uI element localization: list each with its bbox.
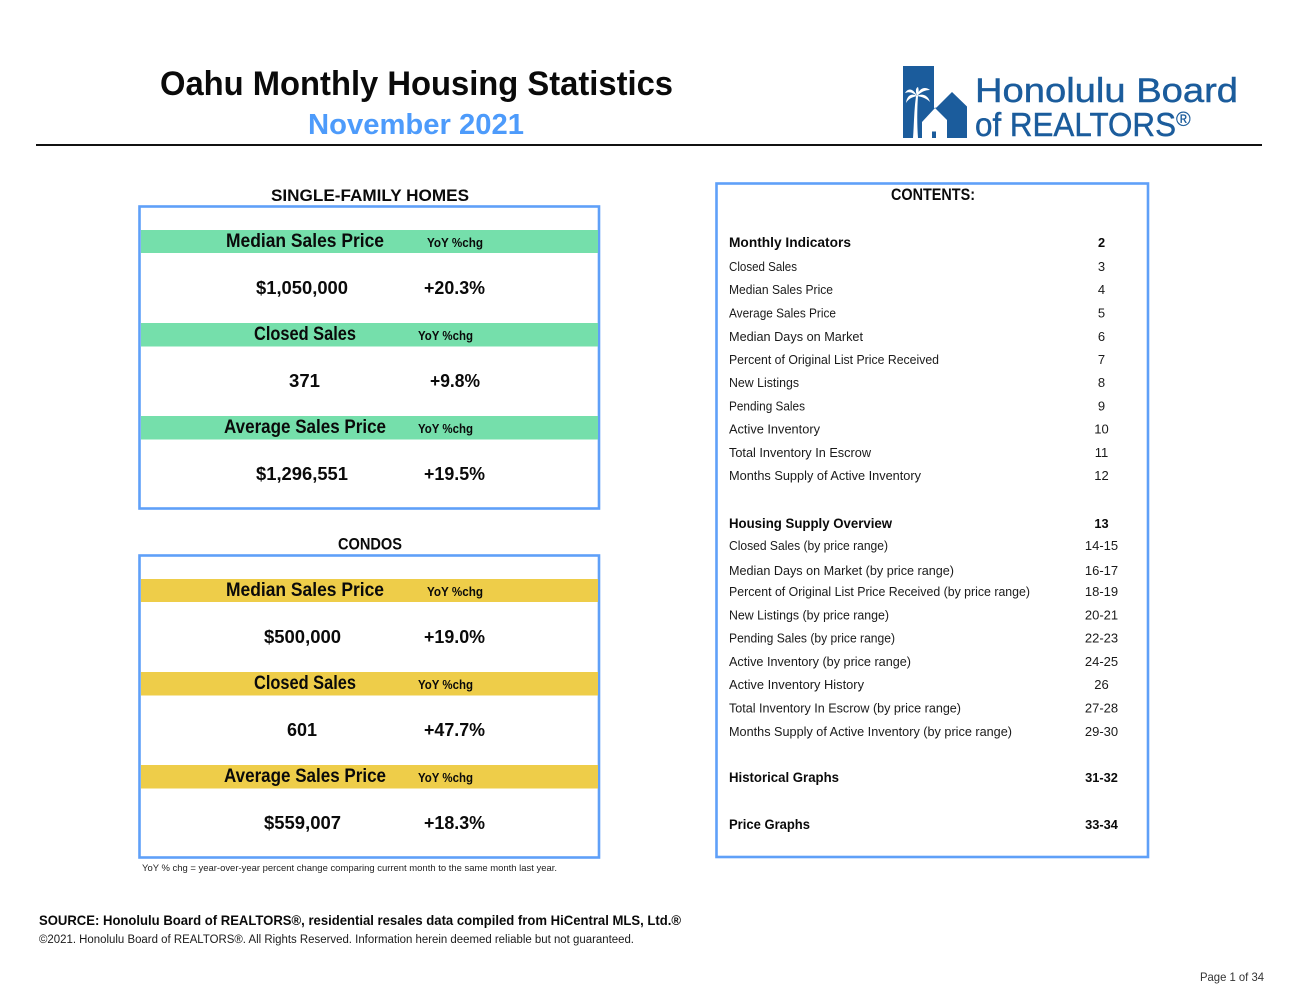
section: price graphs: Price Graphs bbox=[729, 817, 810, 832]
section: housing supply overview: 27-28 bbox=[1085, 700, 1118, 716]
band: closed sales: Closed Sales bbox=[254, 324, 356, 345]
section: housing supply overview: 29-30 bbox=[1085, 724, 1118, 739]
section: historical graphs: Historical Graphs bbox=[729, 770, 839, 785]
heading: single-family homes: SINGLE-FAMILY HOMES bbox=[271, 187, 469, 205]
band: condo average sales price: YoY %chg bbox=[418, 771, 473, 785]
section: monthly indicators: Average Sales Price bbox=[729, 306, 836, 320]
section: housing supply overview: Pending Sales (by price range) bbox=[729, 630, 895, 646]
section: monthly indicators: 3 bbox=[1098, 259, 1105, 274]
logo: Honolulu Board of REALTORS bbox=[903, 66, 1238, 143]
band: condo closed sales: Closed Sales bbox=[254, 673, 356, 694]
section: monthly indicators: 2 bbox=[1098, 235, 1105, 250]
logo text line 1: Honolulu Board bbox=[975, 72, 1238, 110]
section: monthly indicators: 8 bbox=[1098, 375, 1105, 390]
change: closed sales: +9.8% bbox=[430, 370, 480, 391]
section: housing supply overview: Total Inventory In Escrow (by price range) bbox=[729, 700, 961, 716]
band: average sales price: Average Sales Price bbox=[224, 417, 386, 438]
source line: SOURCE: Honolulu Board of REALTORS®, residential resales data compiled from HiCentral MLS, Ltd.® bbox=[39, 912, 682, 928]
section: housing supply overview: 18-19 bbox=[1085, 584, 1118, 599]
value: condo average sales price: $559,007 bbox=[264, 812, 341, 833]
band: condo median sales price: YoY %chg bbox=[427, 585, 483, 599]
section: monthly indicators: 10 bbox=[1094, 422, 1109, 436]
section: housing supply overview: 24-25 bbox=[1085, 654, 1118, 669]
band: closed sales: YoY %chg bbox=[418, 329, 473, 343]
section: monthly indicators: 4 bbox=[1098, 282, 1105, 297]
section: housing supply overview: 22-23 bbox=[1085, 630, 1118, 646]
title: Oahu Monthly Housing Statistics bbox=[160, 65, 673, 103]
section: housing supply overview bbox=[729, 516, 1118, 739]
section: housing supply overview: 26 bbox=[1094, 677, 1109, 692]
band: average sales price bbox=[141, 416, 598, 440]
change: condo average sales price: +18.3% bbox=[424, 812, 485, 833]
section: monthly indicators: Percent of Original List Price Received bbox=[729, 352, 939, 367]
value: condo closed sales: 601 bbox=[287, 719, 317, 740]
section: price graphs: 33-34 bbox=[1085, 817, 1119, 832]
section: historical graphs: 31-32 bbox=[1085, 770, 1118, 785]
band: average sales price: YoY %chg bbox=[418, 422, 473, 436]
band: closed sales bbox=[141, 323, 598, 346]
page number: Page 1 of 34 bbox=[1200, 970, 1264, 984]
section: housing supply overview: 16-17 bbox=[1085, 563, 1118, 578]
section: monthly indicators: Closed Sales bbox=[729, 259, 797, 274]
section: monthly indicators: 7 bbox=[1098, 352, 1105, 367]
subtitle: month: November 2021 bbox=[308, 109, 524, 141]
section: monthly indicators: Active Inventory bbox=[729, 422, 820, 436]
band: median sales price: Median Sales Price bbox=[226, 231, 384, 252]
band: condo average sales price: Average Sales Price bbox=[224, 766, 386, 787]
section: housing supply overview: 20-21 bbox=[1085, 608, 1118, 622]
panel: contents bbox=[716, 184, 1148, 857]
section: housing supply overview: Median Days on Market (by price range) bbox=[729, 563, 954, 578]
logo text line 2: of REALTORS bbox=[975, 106, 1176, 143]
value: closed sales: 371 bbox=[289, 370, 320, 391]
section: housing supply overview: Housing Supply Overview bbox=[729, 516, 892, 531]
band: median sales price bbox=[141, 230, 598, 253]
band: condo closed sales: YoY %chg bbox=[418, 678, 473, 692]
section: monthly indicators: Total Inventory In Escrow bbox=[729, 445, 872, 460]
change: condo closed sales: +47.7% bbox=[424, 719, 485, 740]
value: median sales price: $1,050,000 bbox=[256, 277, 348, 298]
section: monthly indicators: New Listings bbox=[729, 375, 799, 390]
section: housing supply overview: Months Supply of Active Inventory (by price range) bbox=[729, 724, 1012, 739]
logo registered mark: ® bbox=[1176, 109, 1191, 131]
section: monthly indicators: Monthly Indicators bbox=[729, 235, 851, 250]
section: housing supply overview: 13 bbox=[1094, 516, 1109, 531]
section: monthly indicators: Pending Sales bbox=[729, 398, 805, 414]
panel: single-family homes bbox=[140, 206, 599, 508]
heading: condos: CONDOS bbox=[338, 536, 402, 554]
footnote: YoY definition: YoY % chg = year-over-year percent change comparing current month to the same month last year. bbox=[142, 863, 557, 874]
section: monthly indicators: 12 bbox=[1094, 468, 1109, 483]
panel: condos bbox=[140, 556, 599, 858]
section: housing supply overview: 14-15 bbox=[1085, 538, 1118, 553]
band: condo median sales price bbox=[141, 579, 598, 602]
copyright line: ©2021. Honolulu Board of REALTORS®. All Rights Reserved. Information herein deemed reliable but not guaranteed. bbox=[39, 934, 634, 946]
change: average sales price: +19.5% bbox=[424, 463, 485, 484]
value: condo median sales price: $500,000 bbox=[264, 626, 341, 647]
change: condo median sales price: +19.0% bbox=[424, 626, 485, 647]
section: housing supply overview: Closed Sales (by price range) bbox=[729, 538, 888, 553]
section: monthly indicators: 9 bbox=[1098, 398, 1105, 414]
value: average sales price: $1,296,551 bbox=[256, 463, 348, 484]
section: housing supply overview: Active Inventory History bbox=[729, 677, 864, 692]
section: housing supply overview: Percent of Original List Price Received (by price range) bbox=[729, 584, 1030, 599]
header rule bbox=[36, 144, 1262, 146]
section: monthly indicators: 5 bbox=[1098, 306, 1105, 320]
section: monthly indicators: Median Days on Market bbox=[729, 329, 863, 344]
section: housing supply overview: Active Inventory (by price range) bbox=[729, 654, 911, 669]
band: condo median sales price: Median Sales Price bbox=[226, 580, 384, 601]
section: monthly indicators: 6 bbox=[1098, 329, 1105, 344]
band: median sales price: YoY %chg bbox=[427, 236, 483, 250]
section: monthly indicators: 11 bbox=[1095, 445, 1108, 460]
band: condo closed sales bbox=[141, 672, 598, 696]
section: price graphs bbox=[729, 817, 1119, 832]
band: condo average sales price bbox=[141, 765, 598, 788]
change: median sales price: +20.3% bbox=[424, 277, 485, 298]
section: housing supply overview: New Listings (by price range) bbox=[729, 608, 889, 622]
section: monthly indicators: Months Supply of Active Inventory bbox=[729, 468, 921, 483]
icon: buildings, house and palm bbox=[903, 66, 967, 138]
section: historical graphs bbox=[729, 770, 1118, 785]
section: monthly indicators bbox=[729, 235, 1109, 483]
heading: contents: CONTENTS: bbox=[891, 186, 975, 204]
section: monthly indicators: Median Sales Price bbox=[729, 282, 833, 297]
